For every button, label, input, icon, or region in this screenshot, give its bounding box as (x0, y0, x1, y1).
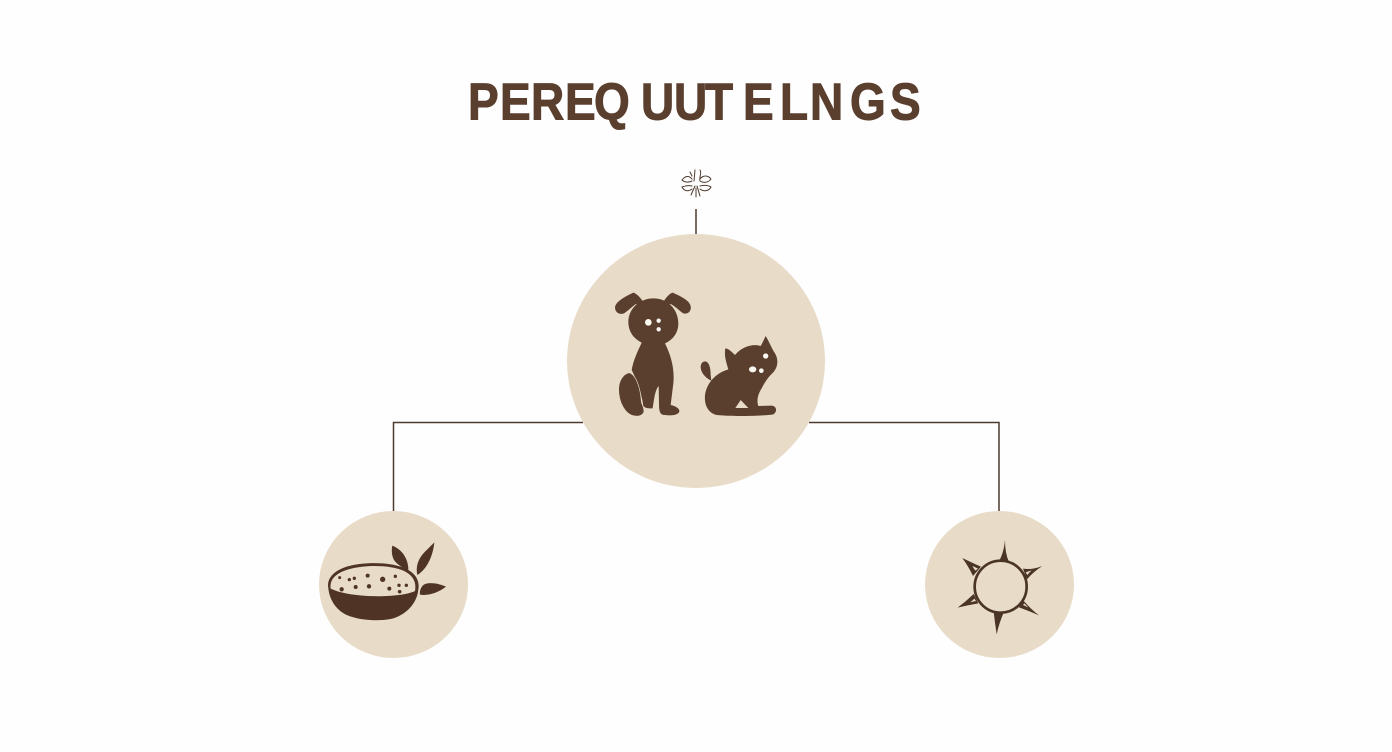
connector: main circle to sun circle (809, 422, 999, 511)
left circle: food (319, 511, 468, 658)
icon: food bowl with leaves (328, 542, 446, 620)
icon: cat (701, 336, 777, 416)
main circle: pets (567, 234, 825, 488)
title: PEREQUUTE LNGS (468, 74, 921, 131)
icon: small floral ornament (682, 170, 711, 197)
connector: main circle to food circle (394, 422, 583, 511)
right circle: sun (925, 511, 1074, 658)
icon: dog (615, 293, 691, 416)
connector: ornament to main circle (695, 209, 697, 234)
icon: sun outline (958, 540, 1042, 634)
